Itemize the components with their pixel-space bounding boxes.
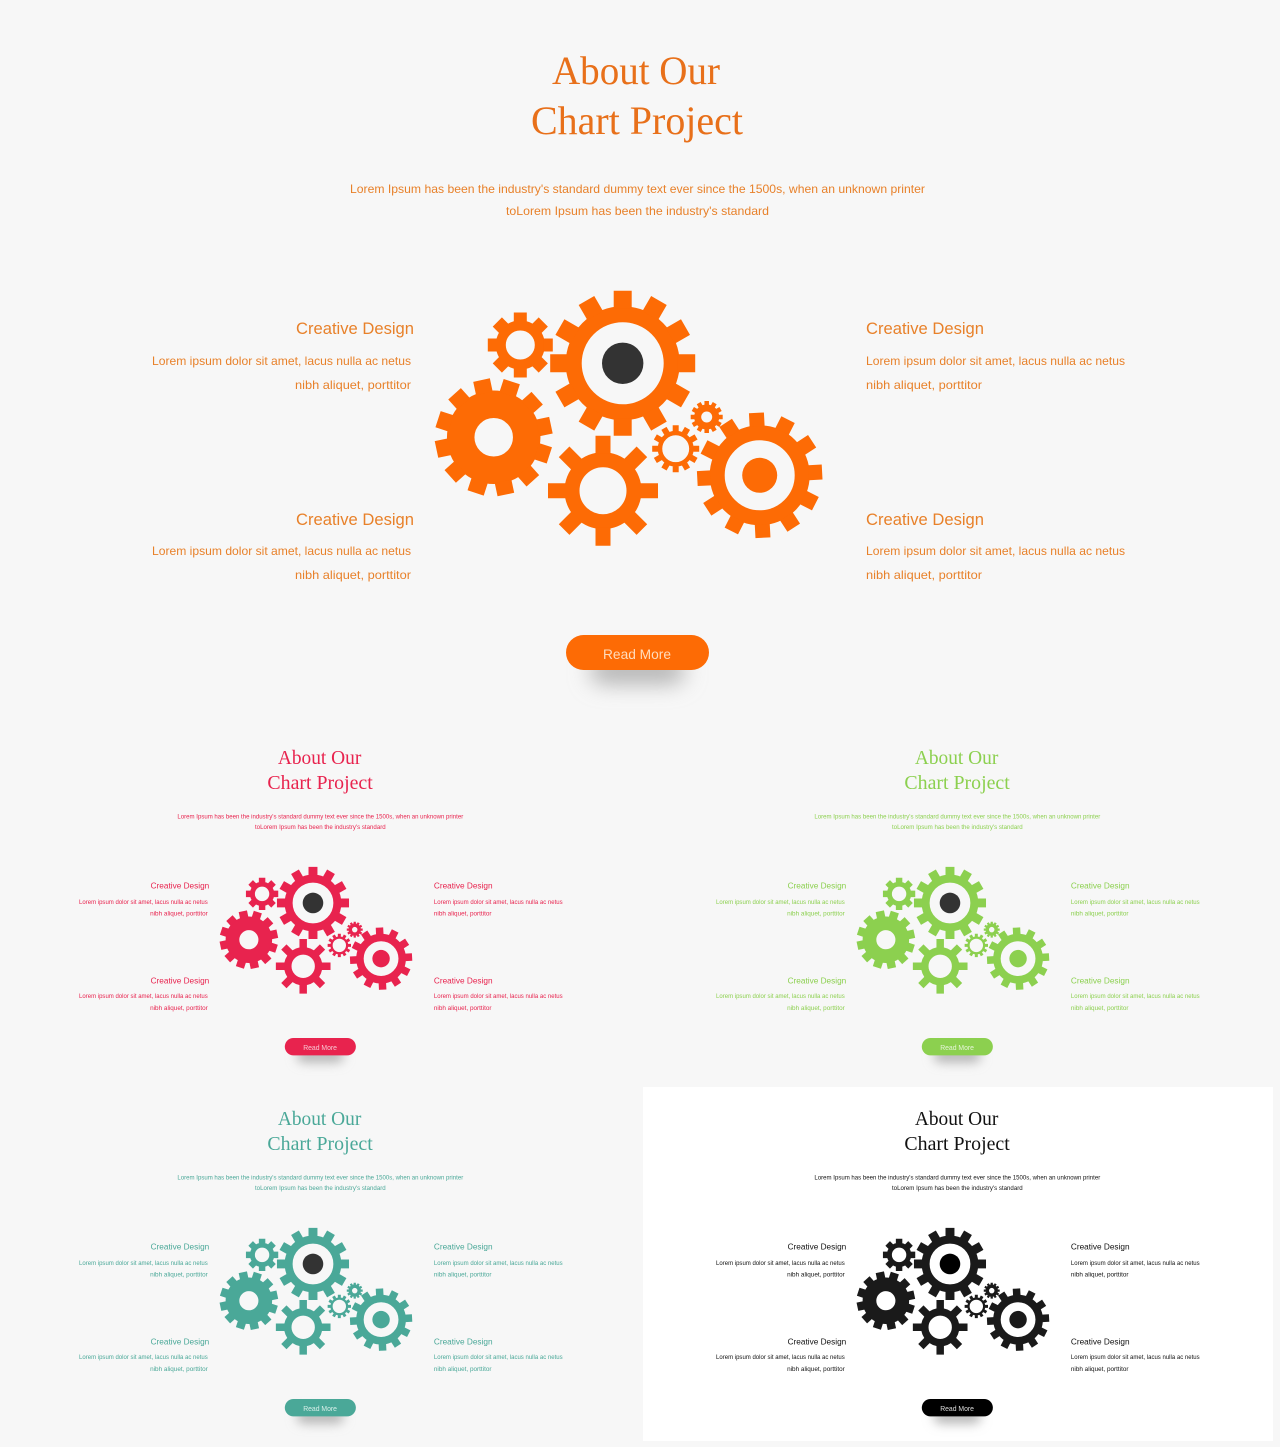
title (904, 1108, 1010, 1155)
text block: bottom right: nibh aliquet, porttitor (1071, 1367, 1129, 1373)
title: About Our (278, 747, 362, 769)
title: Chart Project (267, 772, 373, 794)
text block: top left: Creative Design (788, 1241, 847, 1251)
title: About Our (278, 1108, 362, 1130)
text block: top right: Creative Design (866, 319, 984, 338)
text block: bottom right: nibh aliquet, porttitor (866, 568, 982, 582)
text block: bottom right (1071, 975, 1200, 1012)
text block: top right: nibh aliquet, porttitor (1071, 1273, 1129, 1279)
text block: top left: Creative Design (788, 880, 847, 890)
text block: top right: Lorem ipsum dolor sit amet, lacus nulla ac netus (866, 354, 1125, 368)
icon: gear cluster (212, 1228, 414, 1355)
text block: bottom right: Lorem ipsum dolor sit amet, lacus nulla ac netus (1071, 994, 1200, 1000)
text block: top left: Creative Design (151, 1241, 210, 1251)
text block: top right: nibh aliquet, porttitor (1071, 912, 1129, 918)
title: About Our (915, 1108, 999, 1130)
text block: top left: nibh aliquet, porttitor (150, 1273, 208, 1279)
intro text (814, 814, 1100, 831)
intro text (814, 1175, 1100, 1192)
panel: teal slide (79, 1108, 563, 1423)
text block: top left (79, 1241, 210, 1279)
text block: bottom right: Lorem ipsum dolor sit amet, lacus nulla ac netus (434, 1355, 563, 1361)
title: Chart Project (531, 98, 743, 143)
text block: bottom left: nibh aliquet, porttitor (295, 568, 411, 582)
text block: bottom right: Lorem ipsum dolor sit amet, lacus nulla ac netus (1071, 1355, 1200, 1361)
text block: bottom right: Creative Design (1071, 975, 1130, 985)
text block: bottom left: Lorem ipsum dolor sit amet, lacus nulla ac netus (152, 544, 411, 558)
intro text: Lorem Ipsum has been the industry's standard dummy text ever since the 1500s, when an unknown printer (177, 1175, 463, 1181)
intro text (177, 814, 463, 831)
text block: top right (1071, 1241, 1200, 1279)
title: Chart Project (904, 1133, 1010, 1155)
title (904, 747, 1010, 794)
white panel background (643, 1087, 1273, 1441)
text block: bottom left (716, 975, 847, 1012)
text block: top left: Lorem ipsum dolor sit amet, lacus nulla ac netus (152, 354, 411, 368)
panel: black slide (716, 1108, 1200, 1423)
text block: bottom left: Creative Design (788, 1336, 847, 1346)
title (267, 747, 373, 794)
text block: top right: Lorem ipsum dolor sit amet, lacus nulla ac netus (434, 900, 563, 906)
button: read more (285, 1038, 356, 1062)
text block: bottom left (79, 975, 210, 1012)
icon: gear cluster (420, 291, 825, 546)
text block: top right (434, 880, 563, 918)
text block: bottom left: nibh aliquet, porttitor (150, 1367, 208, 1373)
text block: top right: Creative Design (1071, 1241, 1130, 1251)
text block: bottom right: Lorem ipsum dolor sit amet, lacus nulla ac netus (434, 994, 563, 1000)
intro text (177, 1175, 463, 1192)
text block: top left: Lorem ipsum dolor sit amet, lacus nulla ac netus (716, 1261, 845, 1267)
text block: bottom right: Lorem ipsum dolor sit amet, lacus nulla ac netus (866, 544, 1125, 558)
text block: bottom left: Lorem ipsum dolor sit amet, lacus nulla ac netus (79, 994, 208, 1000)
text block: bottom left: Lorem ipsum dolor sit amet, lacus nulla ac netus (79, 1355, 208, 1361)
text block: top right: nibh aliquet, porttitor (866, 378, 982, 392)
text block: top right: Lorem ipsum dolor sit amet, lacus nulla ac netus (1071, 1261, 1200, 1267)
title (267, 1108, 373, 1155)
intro text: toLorem Ipsum has been the industry's standard (255, 825, 386, 831)
text block: bottom right (1071, 1336, 1200, 1373)
text block: top left: Lorem ipsum dolor sit amet, lacus nulla ac netus (716, 900, 845, 906)
text block: top right: Creative Design (434, 1241, 493, 1251)
text block: top left (716, 1241, 847, 1279)
text block: bottom left: nibh aliquet, porttitor (787, 1006, 845, 1012)
title: Chart Project (267, 1133, 373, 1155)
text block: top right: nibh aliquet, porttitor (434, 1273, 492, 1279)
text block: bottom right: nibh aliquet, porttitor (434, 1006, 492, 1012)
icon: gear cluster (849, 1228, 1051, 1355)
text block: bottom right: Creative Design (434, 975, 493, 985)
text block: top right (866, 319, 1125, 392)
intro text: Lorem Ipsum has been the industry's standard dummy text ever since the 1500s, when an unknown printer (814, 814, 1100, 820)
button: read more (285, 1399, 356, 1423)
text block: bottom right: Creative Design (434, 1336, 493, 1346)
title: About Our (552, 48, 720, 93)
text block: bottom right (866, 510, 1125, 582)
text block: top right (1071, 880, 1200, 918)
text block: top left (152, 319, 414, 392)
button: read more (566, 635, 709, 684)
text block: top right (434, 1241, 563, 1279)
text block: bottom right: nibh aliquet, porttitor (434, 1367, 492, 1373)
text block: bottom left (79, 1336, 210, 1373)
button: read more: Read More (303, 1045, 337, 1052)
panel: green slide (716, 747, 1200, 1062)
text block: bottom left: Lorem ipsum dolor sit amet, lacus nulla ac netus (716, 994, 845, 1000)
text block: bottom left: Creative Design (296, 510, 414, 529)
text block: top right: Lorem ipsum dolor sit amet, lacus nulla ac netus (1071, 900, 1200, 906)
title (531, 48, 743, 143)
text block: bottom right (434, 975, 563, 1012)
title: About Our (915, 747, 999, 769)
text block: bottom left: Creative Design (788, 975, 847, 985)
text block: bottom left (716, 1336, 847, 1373)
text block: top left: nibh aliquet, porttitor (295, 378, 411, 392)
text block: bottom right: Creative Design (1071, 1336, 1130, 1346)
text block: top left (716, 880, 847, 918)
icon: gear cluster (212, 867, 414, 994)
intro text: toLorem Ipsum has been the industry's standard (506, 204, 769, 218)
icon: gear cluster (849, 867, 1051, 994)
text block: bottom right (434, 1336, 563, 1373)
text block: top left: Creative Design (296, 319, 414, 338)
text block: top left: Creative Design (151, 880, 210, 890)
text block: top left: nibh aliquet, porttitor (787, 1273, 845, 1279)
intro text: toLorem Ipsum has been the industry's standard (255, 1186, 386, 1192)
text block: top left: nibh aliquet, porttitor (150, 912, 208, 918)
text block: top right: Creative Design (434, 880, 493, 890)
text block: bottom right: nibh aliquet, porttitor (1071, 1006, 1129, 1012)
button: read more: Read More (603, 646, 671, 662)
text block: bottom left: Creative Design (151, 975, 210, 985)
panel: red slide (79, 747, 563, 1062)
text block: top right: Lorem ipsum dolor sit amet, lacus nulla ac netus (434, 1261, 563, 1267)
text block: bottom left (152, 510, 414, 582)
title: Chart Project (904, 772, 1010, 794)
text block: top left: Lorem ipsum dolor sit amet, lacus nulla ac netus (79, 900, 208, 906)
panel: orange main slide (152, 48, 1125, 684)
text block: bottom left: Lorem ipsum dolor sit amet, lacus nulla ac netus (716, 1355, 845, 1361)
button: read more: Read More (303, 1406, 337, 1413)
button: read more (922, 1399, 993, 1423)
text block: bottom left: Creative Design (151, 1336, 210, 1346)
text block: top right: Creative Design (1071, 880, 1130, 890)
text block: top right: nibh aliquet, porttitor (434, 912, 492, 918)
text block: bottom left: nibh aliquet, porttitor (787, 1367, 845, 1373)
button: read more: Read More (940, 1045, 974, 1052)
text block: bottom right: Creative Design (866, 510, 984, 529)
text block: top left (79, 880, 210, 918)
intro text: Lorem Ipsum has been the industry's standard dummy text ever since the 1500s, when an unknown printer (814, 1175, 1100, 1181)
text block: top left: nibh aliquet, porttitor (787, 912, 845, 918)
intro text: toLorem Ipsum has been the industry's standard (892, 1186, 1023, 1192)
intro text: Lorem Ipsum has been the industry's standard dummy text ever since the 1500s, when an unknown printer (177, 814, 463, 820)
intro text: toLorem Ipsum has been the industry's standard (892, 825, 1023, 831)
text block: bottom left: nibh aliquet, porttitor (150, 1006, 208, 1012)
intro text (350, 182, 925, 218)
intro text: Lorem Ipsum has been the industry's standard dummy text ever since the 1500s, when an unknown printer (350, 182, 925, 196)
button: read more: Read More (940, 1406, 974, 1413)
button: read more (922, 1038, 993, 1062)
text block: top left: Lorem ipsum dolor sit amet, lacus nulla ac netus (79, 1261, 208, 1267)
